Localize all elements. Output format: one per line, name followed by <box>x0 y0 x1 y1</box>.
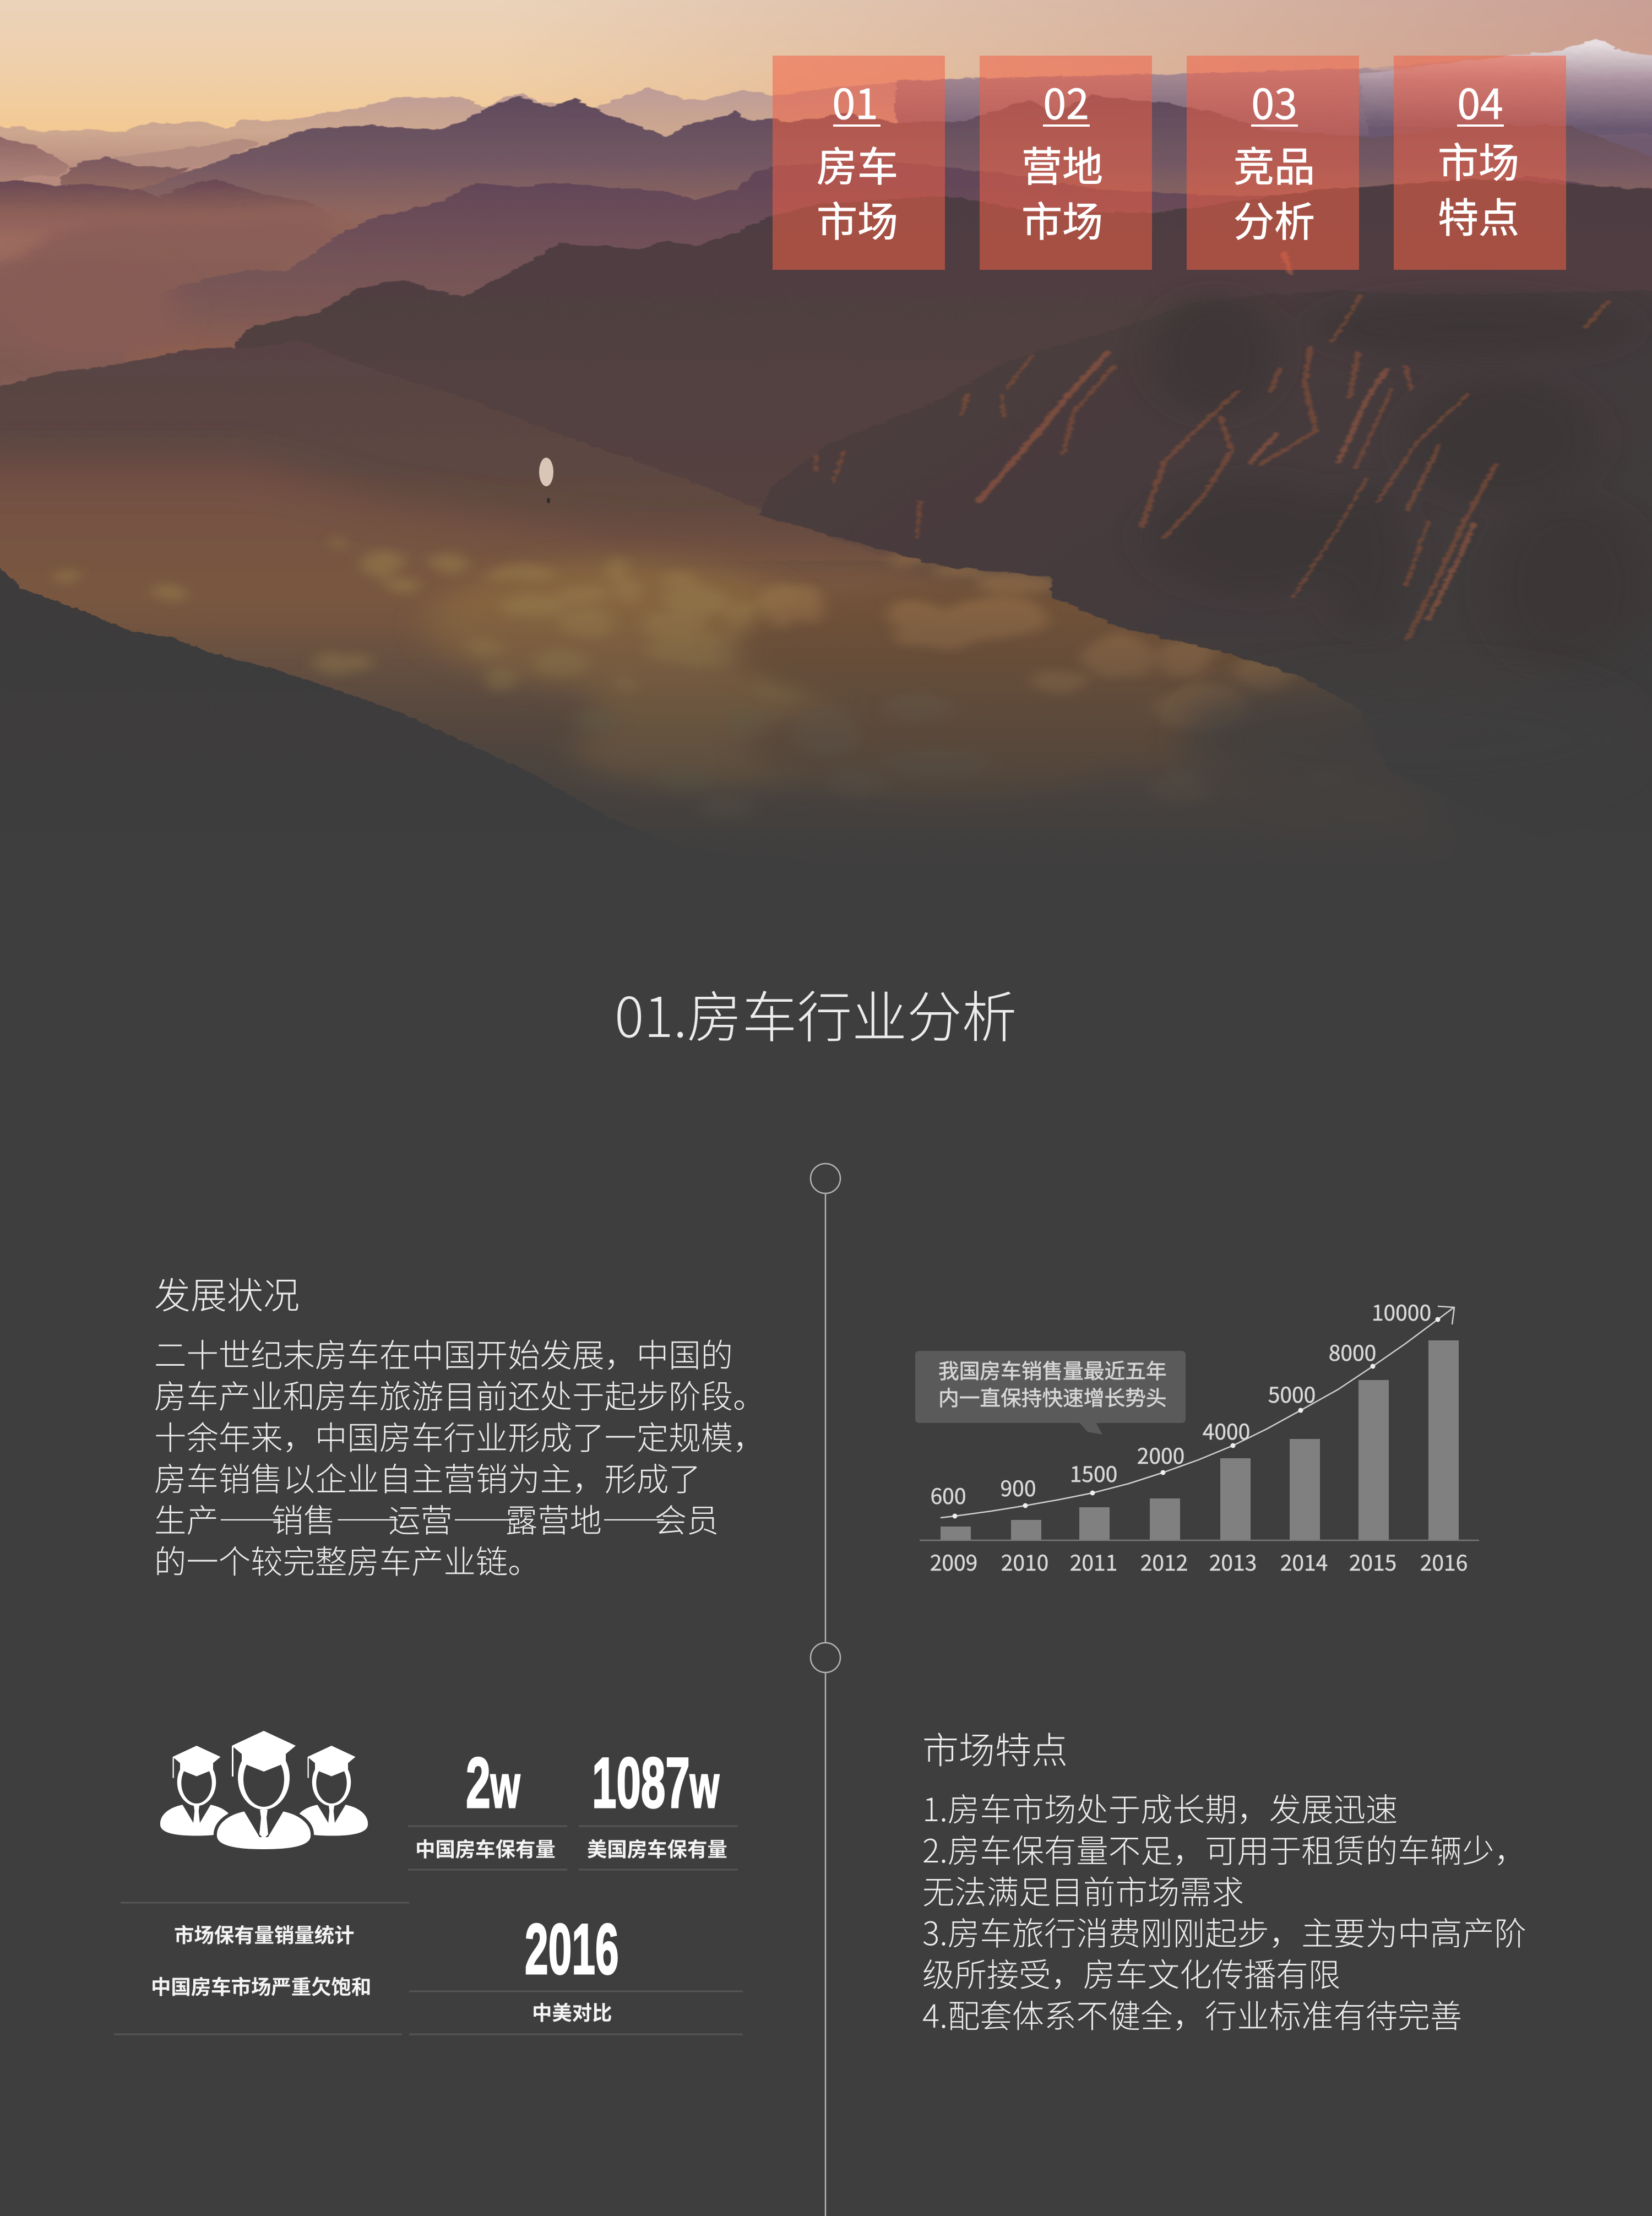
nav tile 04: 04 <box>1457 71 1503 131</box>
rock mountain with lit ridges <box>760 253 1652 894</box>
value labels: 600 <box>931 1480 966 1511</box>
year labels: 2012 <box>1140 1546 1188 1577</box>
year labels: 2015 <box>1349 1546 1396 1577</box>
text block: market characteristics <box>922 1721 1526 2037</box>
text block: development status: 房车销售以企业自主营销为主，形成了 <box>154 1453 701 1500</box>
text block: development status: 的一个较完整房车产业链。 <box>154 1536 540 1583</box>
timeline <box>811 1164 840 2216</box>
nav tile 02: 营地 <box>1021 134 1103 193</box>
nav tile 04: 市场 <box>1438 131 1519 189</box>
stat: US RV stock <box>579 1742 738 1870</box>
icon: three graduates <box>160 1731 368 1851</box>
text block: development status: 发展状况 <box>154 1267 300 1319</box>
callout <box>915 1351 1186 1435</box>
stat: US RV stock: 美国房车保有量 <box>587 1834 727 1862</box>
stat caption: market statistics: 中国房车市场严重欠饱和 <box>151 1971 371 2000</box>
value labels: 900 <box>1001 1472 1036 1503</box>
stat: 2016 comparison: 中美对比 <box>532 1997 612 2026</box>
nav tile 01: 市场 <box>817 189 898 248</box>
stat: China RV stock: 2w <box>466 1742 520 1823</box>
year labels: 2009 <box>930 1546 977 1577</box>
text block: development status <box>154 1267 765 1583</box>
bars <box>941 1340 1459 1540</box>
text block: development status: 十余年来，中国房车行业形成了一定规模， <box>154 1412 765 1459</box>
right graduate <box>295 1746 368 1836</box>
text block: development status: 二十世纪末房车在中国开始发展，中国的 <box>154 1329 733 1376</box>
nav tile 03: 分析 <box>1233 189 1315 248</box>
dark foreground slope <box>0 565 1012 952</box>
text block: market characteristics: 级所接受，房车文化传播有限 <box>922 1949 1340 1996</box>
nav tile 01 <box>773 56 945 270</box>
callout: 我国房车销售量最近五年 <box>938 1354 1167 1384</box>
value labels: 10000 <box>1372 1296 1431 1327</box>
value labels: 8000 <box>1329 1337 1376 1367</box>
valley haze and clouds <box>0 465 1517 946</box>
year labels: 2014 <box>1280 1546 1328 1577</box>
stat: China RV stock: 中国房车保有量 <box>415 1834 556 1862</box>
year labels: 2013 <box>1209 1546 1257 1577</box>
paraglider <box>539 458 553 503</box>
nav tile 04 <box>1394 56 1566 270</box>
curve points <box>953 1317 1441 1519</box>
bar chart: RV sales 2009-2016 <box>915 1296 1479 1577</box>
callout: 内一直保持快速增长势头 <box>938 1381 1167 1411</box>
year labels <box>930 1546 1468 1577</box>
stat caption: market statistics <box>114 1903 409 2034</box>
nav tile 03: 竞品 <box>1233 134 1315 193</box>
year labels: 2011 <box>1070 1546 1117 1577</box>
centre graduate <box>215 1731 312 1851</box>
hero photo: mountain sunset <box>0 0 1652 1002</box>
stat: 2016 comparison: 2016 <box>525 1909 619 1989</box>
stat: 2016 comparison <box>409 1909 743 2034</box>
nav tile 04: 特点 <box>1438 186 1519 245</box>
text block: market characteristics: 无法满足目前市场需求 <box>922 1866 1244 1913</box>
value labels: 4000 <box>1203 1415 1250 1446</box>
text block: market characteristics: 3.房车旅行消费刚刚起步，主要为中高产阶 <box>922 1908 1526 1954</box>
stat caption: market statistics: 市场保有量销量统计 <box>174 1920 355 1948</box>
text block: market characteristics: 1.房车市场处于成长期，发展迅速 <box>922 1784 1398 1831</box>
nav tile 03 <box>1187 56 1359 270</box>
nav tile 02 <box>980 56 1152 270</box>
text block: market characteristics: 2.房车保有量不足，可用于租赁的车辆少， <box>922 1825 1526 1872</box>
soft shadow over lower rock edge <box>1178 677 1641 799</box>
nav tile 02: 02 <box>1043 71 1089 131</box>
year labels: 2016 <box>1420 1546 1468 1577</box>
trend curve <box>941 1306 1454 1518</box>
stat: China RV stock <box>408 1742 567 1870</box>
value labels <box>931 1296 1431 1511</box>
value labels: 1500 <box>1070 1458 1117 1489</box>
text block: development status: 生产——销售——运营——露营地——会员 <box>154 1495 719 1541</box>
nav tile 02: 市场 <box>1021 189 1103 248</box>
nav tile 01: 01 <box>832 71 878 131</box>
nav tile 01: 房车 <box>817 134 898 193</box>
text block: market characteristics: 4.配套体系不健全，行业标准有待完善 <box>922 1990 1462 2037</box>
stat: US RV stock: 1087w <box>592 1742 719 1823</box>
text block: market characteristics: 市场特点 <box>922 1721 1068 1774</box>
text block: development status: 房车产业和房车旅游目前还处于起步阶段。 <box>154 1371 765 1417</box>
value labels: 5000 <box>1268 1378 1316 1409</box>
section title: 01.房车行业分析 <box>615 973 1017 1053</box>
nav tile 03: 03 <box>1251 71 1297 131</box>
value labels: 2000 <box>1137 1440 1184 1470</box>
left graduate <box>160 1746 233 1836</box>
year labels: 2010 <box>1001 1546 1048 1577</box>
